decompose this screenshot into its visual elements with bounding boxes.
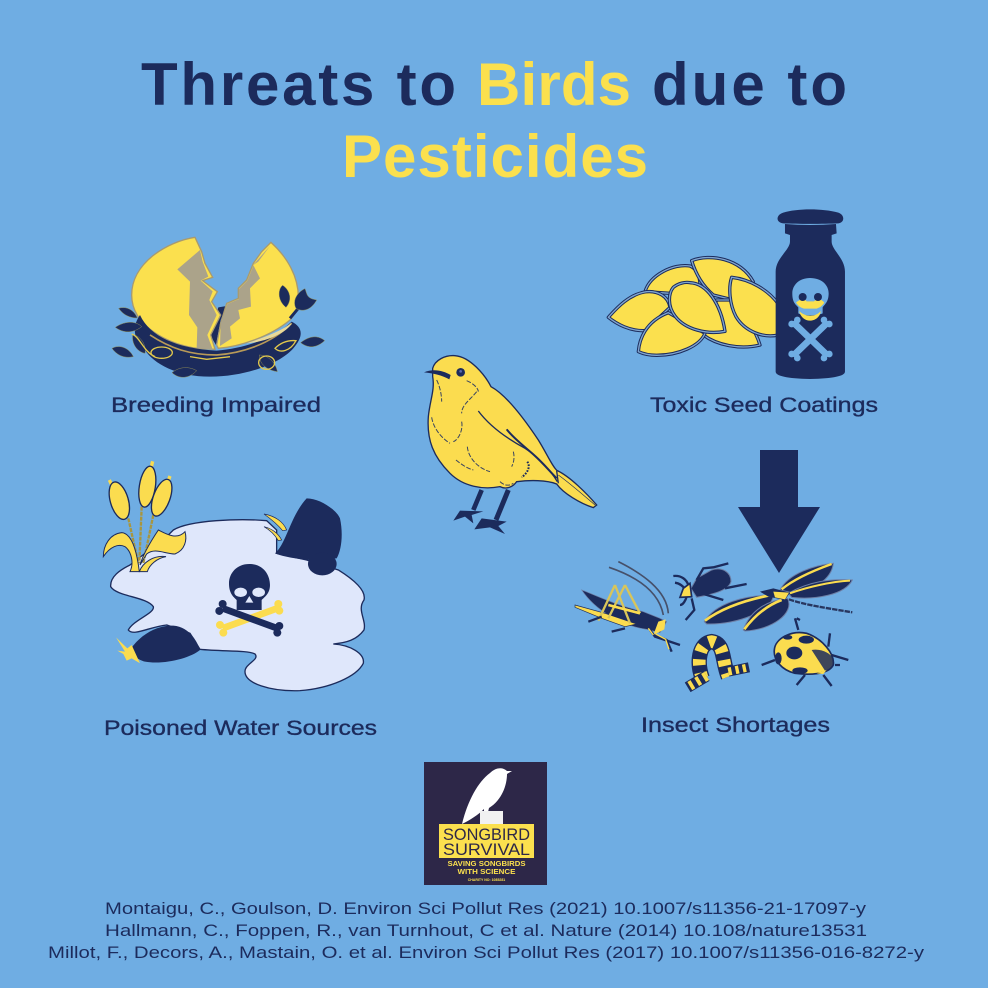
rocks — [130, 498, 342, 663]
logo: songbird survival: CHARITY NO: 1085281 — [468, 878, 505, 882]
title: Pesticides — [342, 123, 648, 190]
title — [141, 51, 847, 190]
cattails — [103, 461, 186, 572]
caterpillar — [688, 642, 749, 687]
logo: songbird survival: SURVIVAL — [443, 840, 530, 859]
skull and crossbones — [215, 564, 283, 637]
references: Montaigu, C., Goulson, D. Environ Sci Pollut Res (2021) 10.1007/s11356-21-17097-y — [105, 900, 867, 918]
title: Threats to — [141, 51, 456, 118]
arrow: down — [738, 450, 820, 573]
icon: poisoned water pond — [103, 461, 364, 691]
icon: toxic seeds and poison bottle — [608, 209, 845, 379]
references: Hallmann, C., Foppen, R., van Turnhout, C et al. Nature (2014) 10.108/nature13531 — [105, 922, 867, 940]
dragonfly — [704, 563, 852, 631]
label: toxic seed coatings: Toxic Seed Coatings — [650, 394, 878, 417]
references: Millot, F., Decors, A., Mastain, O. et al. Environ Sci Pollut Res (2017) 10.1007/s11356-016-8272-y — [48, 944, 925, 962]
logo: songbird survival — [424, 762, 547, 885]
title: Birds — [477, 51, 631, 118]
illustration: yellow bird — [424, 356, 597, 534]
beetle — [673, 563, 747, 620]
ladybird — [762, 618, 848, 686]
icon: cracked egg in nest — [112, 237, 325, 377]
label: breeding impaired: Breeding Impaired — [111, 394, 321, 417]
title: due to — [652, 51, 847, 118]
label: poisoned water sources: Poisoned Water Sources — [104, 717, 377, 740]
label: insect shortages: Insect Shortages — [641, 714, 830, 737]
icon: insects — [575, 562, 852, 687]
references — [48, 900, 925, 962]
grasshopper — [575, 562, 680, 652]
logo: songbird survival: WITH SCIENCE — [458, 867, 516, 876]
logo: songbird survival: SONGBIRD — [443, 825, 530, 844]
logo: songbird survival: SAVING SONGBIRDS — [448, 859, 526, 868]
